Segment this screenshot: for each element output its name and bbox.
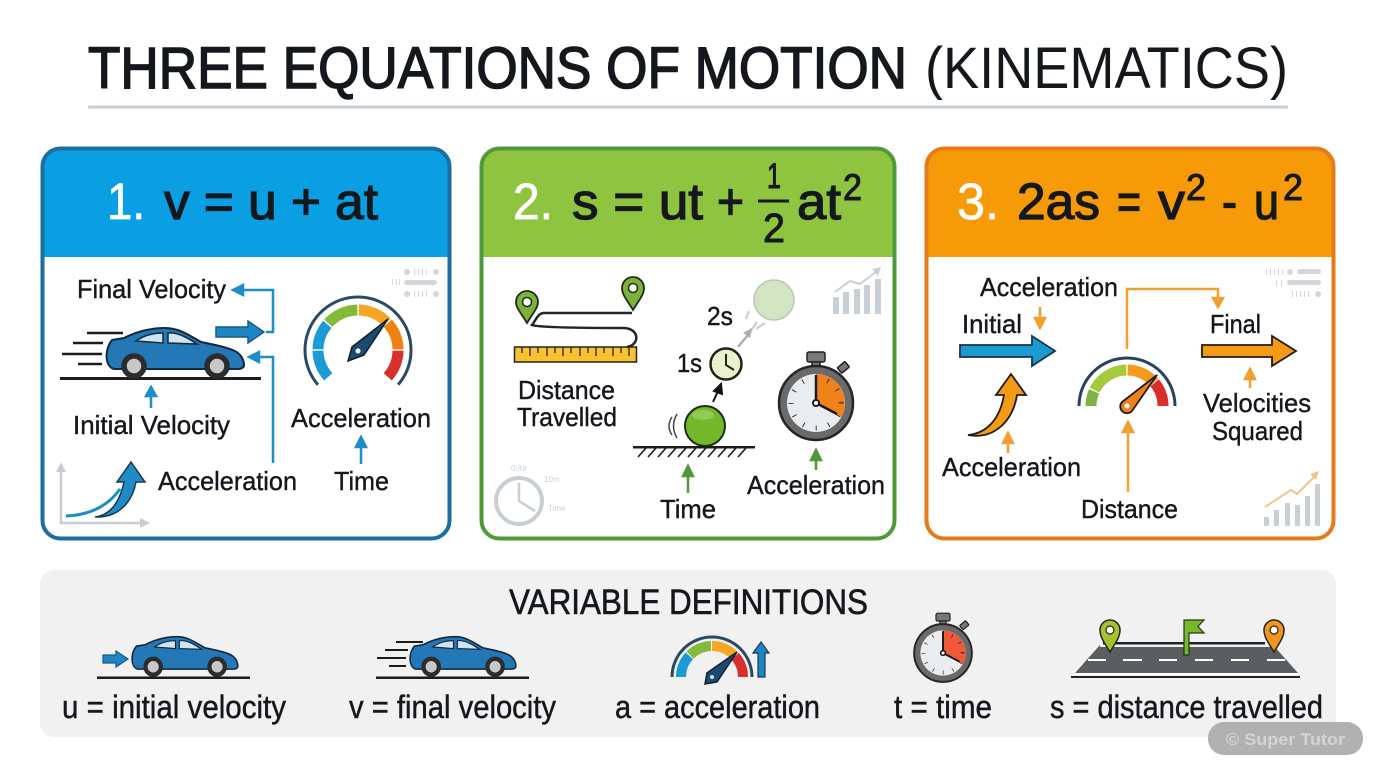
arrow: initial velocity <box>146 387 156 408</box>
heading: 2as = v^2 - u^2: 3. <box>957 173 999 230</box>
watermark: © Super Tutor <box>1226 730 1345 749</box>
icon: road with pins and flag <box>1071 620 1300 678</box>
text: acceleration gauge label: Acceleration <box>291 403 431 433</box>
text: final: Final <box>1210 309 1261 339</box>
text: acceleration: Acceleration <box>158 466 297 496</box>
heading: v = u + at: v = u + at <box>164 173 378 230</box>
arrow: time to acceleration <box>356 437 366 464</box>
text: 1s: 1s <box>677 348 702 378</box>
heading: s = ut + 1/2 at^2: at <box>797 173 841 230</box>
arrow: small up <box>1245 369 1255 388</box>
panel: equation 3 <box>926 148 1334 538</box>
text: time: Time <box>334 466 389 496</box>
heading: 2as = v^2 - u^2: u <box>1254 173 1279 230</box>
icon: faded clock: Time <box>548 504 566 513</box>
icon: car with arrow <box>97 637 250 679</box>
text: distance travelled: Travelled <box>517 402 617 432</box>
text: acceleration bottom: Acceleration <box>942 452 1081 482</box>
title: THREE EQUATIONS OF MOTION <box>88 36 907 101</box>
icon: gauge with up arrow <box>668 633 769 721</box>
arrow: gauge to final <box>1127 289 1223 349</box>
text: acceleration top: Acceleration <box>980 272 1118 302</box>
icon: stopwatch <box>914 613 972 682</box>
arrow: time up <box>683 466 693 493</box>
arrow: small down <box>1035 307 1045 328</box>
text: a: a = acceleration <box>615 689 820 725</box>
arrow: ball to clock <box>713 384 722 402</box>
text: initial velocity: Initial Velocity <box>73 410 230 440</box>
panel: variable definitions <box>40 570 1336 737</box>
icon: faded clock <box>496 464 566 524</box>
gauge: acceleration <box>283 275 433 425</box>
icon: small clock <box>710 348 742 380</box>
heading: 2as = v^2 - u^2: = <box>1117 173 1141 230</box>
panel: equation 2 <box>482 148 894 538</box>
heading: s = ut + 1/2 at^2: 2. <box>513 173 553 230</box>
heading: 2as = v^2 - u^2 <box>957 167 1303 230</box>
heading: 2as = v^2 - u^2: 2 <box>1283 167 1303 208</box>
text: u: u = initial velocity <box>62 689 286 725</box>
arrow: to final velocity <box>233 285 273 332</box>
title: (KINEMATICS) <box>925 36 1288 101</box>
arrow: block velocity <box>216 321 264 343</box>
icon: faded ball at 2s <box>738 280 794 347</box>
arrow: distance up <box>1123 422 1133 492</box>
icon: decorative chart <box>833 267 881 314</box>
heading: 2as = v^2 - u^2: 2as <box>1017 173 1100 230</box>
icon: decorative controls <box>1266 269 1321 297</box>
text: initial: Initial <box>962 309 1022 339</box>
icon: decorative controls <box>392 269 439 297</box>
heading: s = ut + 1/2 at^2: s = ut <box>572 173 703 230</box>
arrow: acceleration up <box>811 450 821 470</box>
text: distance travelled <box>517 375 617 432</box>
heading: s = ut + 1/2 at^2: 2 <box>763 205 785 251</box>
icon: faded clock: 10m <box>544 475 560 484</box>
heading: 2as = v^2 - u^2: 2 <box>1186 167 1206 208</box>
text: distance travelled: Distance <box>518 375 615 405</box>
text: velocities squared <box>1203 388 1311 446</box>
heading: s = ut + 1/2 at^2: 1 <box>767 157 781 196</box>
icon: car with speed lines <box>376 637 529 679</box>
arrow: initial velocity <box>960 336 1055 366</box>
heading: 2as = v^2 - u^2: - <box>1222 173 1237 230</box>
text: v: v = final velocity <box>349 689 556 725</box>
icon: stopwatch <box>779 352 853 440</box>
icon: rolling ball <box>633 406 755 457</box>
text: final velocity: Final Velocity <box>77 274 226 304</box>
arrow: final velocity <box>1202 336 1296 366</box>
heading: s = ut + 1/2 at^2: + <box>717 173 744 230</box>
text: acceleration: Acceleration <box>747 470 885 500</box>
text: distance: Distance <box>1081 494 1178 524</box>
icon: acceleration graph <box>56 462 150 528</box>
icon: faded clock: 0:/hr <box>511 464 527 473</box>
text: velocities squared: Velocities <box>1203 388 1311 418</box>
heading: v = u + at: 1. <box>107 173 145 230</box>
gauge: distance <box>1076 355 1178 457</box>
text: s: s = distance travelled <box>1050 689 1323 725</box>
text: 2s: 2s <box>707 301 733 331</box>
text: t: t = time <box>894 689 992 725</box>
heading: variable definitions: VARIABLE DEFINITIONS <box>509 583 868 622</box>
heading: 2as = v^2 - u^2: v <box>1158 173 1186 230</box>
text: time: Time <box>660 494 716 524</box>
arrow: curved acceleration <box>968 374 1026 436</box>
arrow: small up <box>1003 433 1013 453</box>
icon: decorative chart <box>1264 471 1320 526</box>
icon: moving car <box>60 328 261 380</box>
icon: distance path and ruler <box>514 277 644 362</box>
watermark <box>1208 722 1363 755</box>
heading: s = ut + 1/2 at^2: 2 <box>843 167 862 208</box>
text: velocities squared: Squared <box>1212 416 1303 446</box>
heading: s = ut + 1/2 at^2 <box>513 157 862 251</box>
panel: equation 1 <box>42 148 450 538</box>
arrow: acceleration to car <box>249 352 273 463</box>
